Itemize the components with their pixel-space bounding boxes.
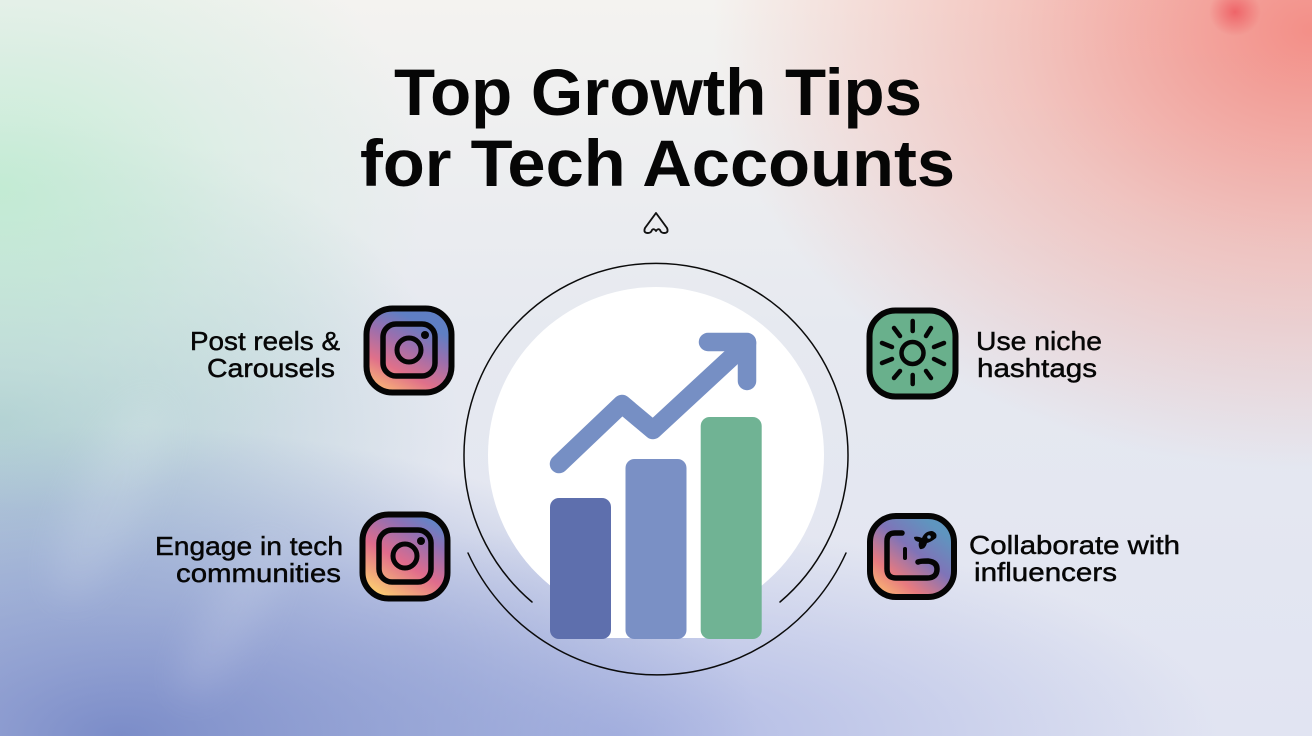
central chart emblem (464, 263, 848, 675)
label: collaborate: influencers (974, 557, 1117, 587)
icon: camera gradient bottom-left (362, 514, 448, 598)
bar 1 (550, 498, 611, 639)
label: engage (155, 531, 343, 588)
label: engage: Engage in tech (155, 531, 343, 561)
icon: camera gradient top-left (366, 308, 452, 392)
label: post reels (190, 326, 340, 383)
title: for Tech Accounts (360, 126, 955, 200)
label: post reels: Post reels & (190, 326, 340, 356)
lower ring arc (468, 553, 846, 675)
icon: small arrowhead (644, 213, 668, 233)
label: post reels: Carousels (207, 353, 335, 383)
label: hashtags: Use niche (976, 326, 1102, 356)
title (360, 55, 955, 200)
bar 3 (701, 417, 762, 639)
label: hashtags: hashtags (977, 353, 1097, 383)
outer ring arc (464, 263, 848, 602)
title: Top Growth Tips (394, 55, 922, 129)
texture: pale streaks (33, 386, 298, 711)
label: engage: communities (176, 558, 341, 588)
bar 2 (626, 459, 686, 639)
icon: collaboration gradient (870, 516, 954, 597)
label: hashtags (976, 326, 1102, 383)
label: collaborate (969, 530, 1180, 587)
icon: green sun (870, 310, 956, 396)
white disc (488, 287, 824, 638)
growth arrow (559, 342, 747, 464)
label: collaborate: Collaborate with (969, 530, 1180, 560)
